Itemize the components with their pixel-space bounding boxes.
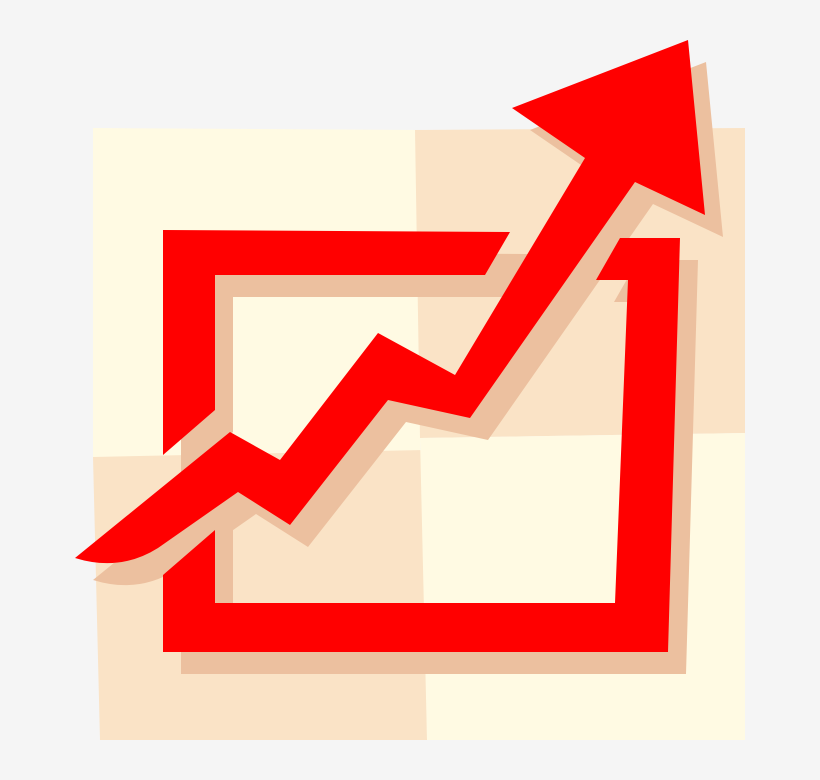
checkered background square — [93, 128, 745, 740]
red frame — [163, 230, 680, 652]
red arrow — [75, 40, 705, 563]
shadows — [93, 62, 723, 674]
